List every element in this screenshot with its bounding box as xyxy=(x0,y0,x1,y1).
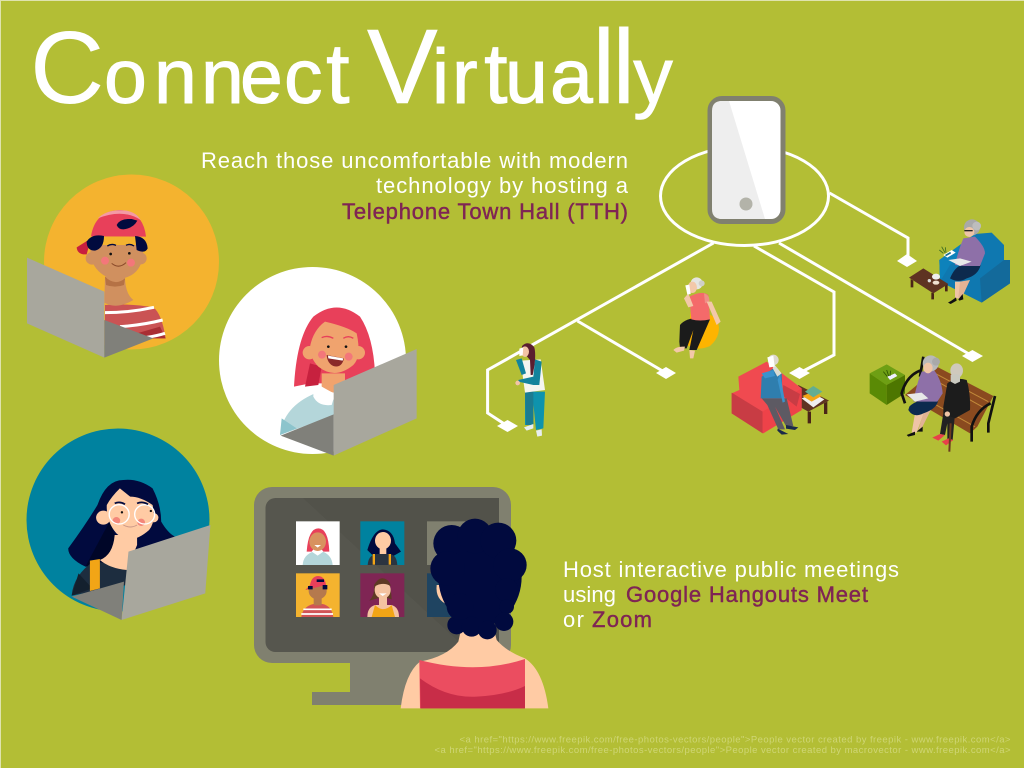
text block: online meetings: Host interactive public meetings xyxy=(563,557,899,582)
thumbnail: grey tile xyxy=(427,521,470,565)
thumbnail: woman with glasses xyxy=(360,521,404,565)
bench xyxy=(902,357,995,442)
person: boy with cap on orange circle xyxy=(27,174,219,358)
thumbnail: boy with cap xyxy=(296,573,340,617)
attribution text: <a href="https://www.freepik.com/free-photos-vectors/people">People vector created by macrovector - www.freepik.com</a> xyxy=(434,745,1011,756)
text block: online meetings: or xyxy=(563,607,584,632)
person: woman with curly hair viewed from behind xyxy=(401,519,548,708)
laptop xyxy=(281,349,417,456)
person: woman seated on yellow ball xyxy=(673,277,721,358)
desktop monitor xyxy=(254,487,511,705)
video call thumbnails xyxy=(296,521,470,617)
text block: online meetings: Google Hangouts Meet xyxy=(626,582,868,607)
title: ir xyxy=(432,34,478,120)
person: elderly man on red armchair with side table xyxy=(732,355,829,435)
person: woman standing on phone xyxy=(515,343,545,437)
text block: telephone town hall: technology by hosting a xyxy=(376,173,629,198)
thumbnail: navy tile xyxy=(427,573,460,617)
text block: telephone town hall: Telephone Town Hall (TTH) xyxy=(342,199,628,224)
connector end diamonds xyxy=(497,254,983,432)
thumbnail: pink-haired girl xyxy=(296,521,340,565)
title: y xyxy=(633,31,673,120)
network connector lines xyxy=(488,146,972,426)
attribution text: <a href="https://www.freepik.com/free-photos-vectors/people">People vector created by freepik - www.freepik.com</a> xyxy=(460,734,1011,746)
title: ua xyxy=(505,34,593,120)
text block: telephone town hall xyxy=(201,148,629,224)
text block: telephone town hall: Reach those uncomfortable with modern xyxy=(201,148,628,173)
coffee table xyxy=(909,268,948,299)
icon: smartphone xyxy=(710,98,783,222)
thumbnail: woman in yellow top xyxy=(360,573,404,617)
title: t xyxy=(484,27,508,122)
title: t xyxy=(326,27,350,122)
attribution text xyxy=(434,734,1011,756)
text block: online meetings xyxy=(563,557,899,632)
laptop xyxy=(72,525,210,620)
title: ll xyxy=(592,8,636,126)
curly hair xyxy=(430,519,527,639)
text block: online meetings: Zoom xyxy=(592,607,652,632)
man on bench xyxy=(940,413,955,440)
side table with books xyxy=(793,385,829,423)
person: elderly couple on bench with green side table xyxy=(870,355,995,452)
title: onnec xyxy=(104,34,322,120)
person: pink-haired girl on white circle xyxy=(219,267,417,456)
woman on bench xyxy=(912,410,925,433)
green side table xyxy=(870,364,905,405)
title: C xyxy=(30,10,104,125)
title: V xyxy=(367,8,438,126)
person: woman with glasses on teal circle xyxy=(26,428,210,620)
laptop xyxy=(27,258,153,358)
person: elderly woman on blue armchair with table xyxy=(909,219,1010,304)
title xyxy=(30,8,673,126)
text block: online meetings: using xyxy=(563,582,616,607)
